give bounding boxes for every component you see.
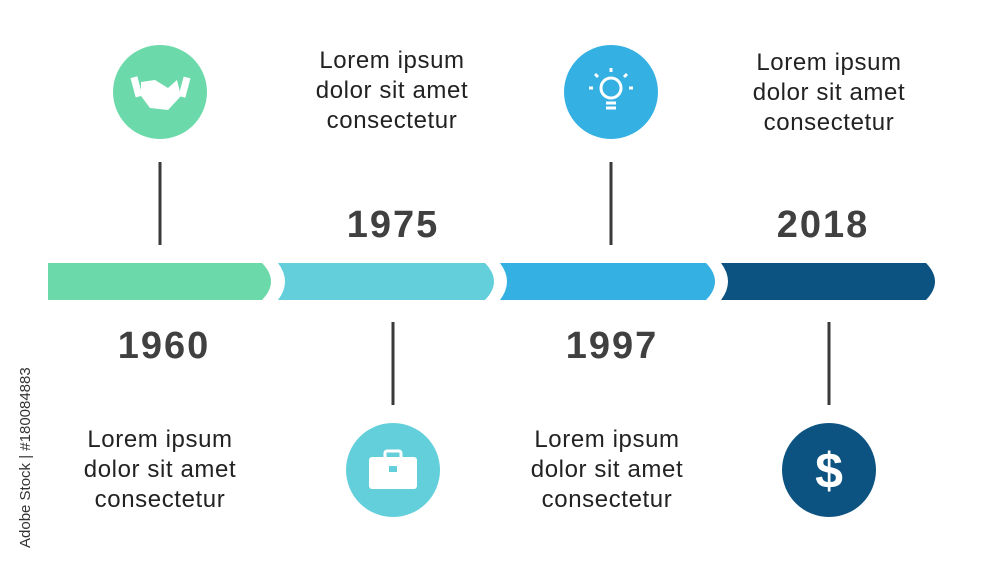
text blocks: consectetur	[542, 486, 672, 513]
text blocks: dolor sit amet	[531, 456, 683, 483]
text blocks: Lorem ipsum	[319, 47, 465, 74]
text blocks	[84, 47, 905, 513]
icon: light bulb	[564, 45, 658, 139]
text blocks: consectetur	[95, 486, 225, 513]
years: 2018	[777, 204, 869, 246]
text blocks: dolor sit amet	[84, 456, 236, 483]
years	[118, 204, 869, 367]
icon: handshake	[113, 45, 207, 139]
text blocks: Lorem ipsum	[87, 426, 233, 453]
text blocks: Lorem ipsum	[534, 426, 680, 453]
text blocks: dolor sit amet	[316, 77, 468, 104]
timeline bar	[48, 263, 935, 300]
text blocks: consectetur	[764, 109, 894, 136]
text blocks: Lorem ipsum	[756, 49, 902, 76]
years: 1975	[347, 204, 439, 246]
text blocks: dolor sit amet	[753, 79, 905, 106]
icon: briefcase	[346, 423, 440, 517]
text blocks: consectetur	[327, 107, 457, 134]
connector lines	[160, 162, 829, 405]
watermark side text: Adobe Stock | #180084883	[17, 367, 34, 548]
years: 1960	[118, 325, 210, 367]
years: 1997	[566, 325, 658, 367]
icon: dollar: $	[815, 443, 843, 499]
icon: dollar	[782, 423, 876, 517]
